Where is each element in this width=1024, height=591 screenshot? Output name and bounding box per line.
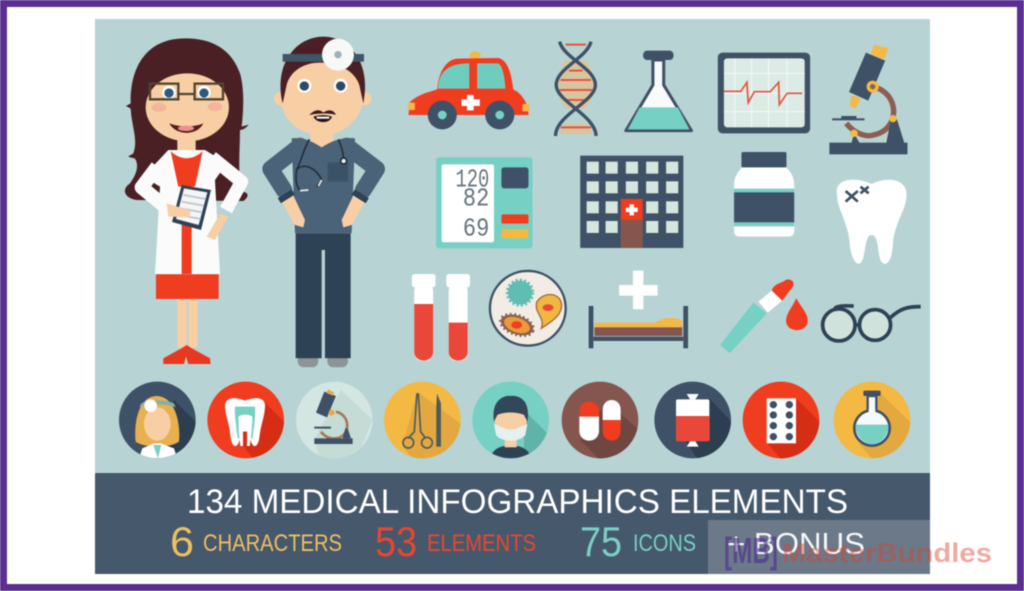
round icon: female doctor (118, 381, 196, 458)
bonus label: + BONUS (727, 526, 865, 561)
glasses (150, 84, 223, 99)
mouth (169, 123, 203, 133)
icon: microscope (829, 45, 907, 154)
watermark logo: [MB] (724, 530, 778, 571)
stat: characters: CHARACTERS (203, 530, 342, 557)
watermark: MasterBundles (708, 520, 992, 574)
round icon: blood bag (654, 381, 732, 459)
torso (292, 138, 355, 233)
left arm (142, 167, 165, 207)
icon: blood pressure monitor: 82 (463, 184, 489, 214)
neck (311, 127, 333, 147)
character: male doctor (271, 37, 377, 367)
fringe (145, 55, 231, 88)
stat: elements: 53 (375, 518, 417, 565)
face (146, 73, 229, 141)
neck (177, 133, 196, 157)
eyes (297, 79, 348, 93)
stat: elements: ELEMENTS (427, 530, 536, 557)
right hand (207, 214, 228, 240)
hair (281, 37, 365, 103)
right arm (212, 157, 242, 210)
cheeks (152, 102, 222, 112)
icon: medicine jar (734, 152, 794, 237)
icon: dropper with blood (720, 280, 808, 353)
icons: top and middle rows (408, 42, 907, 264)
icon: ambulance (408, 51, 529, 129)
icon: tooth (837, 180, 907, 264)
stat: characters (170, 518, 342, 565)
round icon: round flask (833, 380, 911, 460)
icons: bottom row (412, 271, 921, 361)
icon: hospital (580, 156, 683, 248)
icon row: round long-shadow icons (119, 382, 919, 467)
panel: illustration background (95, 19, 930, 574)
round icon: microscope (296, 382, 373, 460)
icon: blood pressure monitor: 69 (463, 214, 489, 244)
clipboard (172, 185, 211, 230)
eyes (162, 86, 211, 99)
head (280, 57, 363, 135)
hair back (125, 38, 249, 201)
icon: DNA helix (556, 42, 596, 136)
left hand (167, 203, 191, 217)
icon: blood pressure monitor (436, 157, 533, 248)
icon: heart monitor (718, 53, 810, 133)
arms (271, 146, 377, 190)
banner (95, 473, 930, 574)
stat: icons: 75 (580, 518, 622, 565)
shoes (298, 355, 348, 367)
skirt (156, 274, 219, 299)
stat: icons (580, 518, 696, 565)
pocket (328, 162, 348, 182)
watermark name: MasterBundles (782, 538, 992, 568)
dress (171, 151, 203, 274)
trousers (296, 233, 351, 358)
round icon: blister pack (742, 380, 820, 460)
banner title: 134 MEDICAL INFOGRAPHICS ELEMENTS (187, 483, 848, 521)
stat: elements (375, 518, 536, 565)
icon: hospital bed with cross (589, 271, 688, 348)
head mirror (322, 39, 354, 71)
icon: petri dish with microbes (490, 271, 566, 346)
cuffs (279, 192, 367, 201)
character: female doctor (125, 38, 249, 364)
icon: eyeglasses (823, 306, 921, 341)
icon: flask (626, 51, 691, 131)
legs (177, 299, 198, 348)
round icon: surgical instruments (383, 380, 462, 460)
round icon: pills (561, 381, 639, 460)
round icon: tooth (206, 380, 285, 460)
hands (282, 194, 365, 227)
stethoscope (296, 139, 347, 191)
coat body (143, 150, 227, 274)
round icon: surgeon with mask (472, 381, 550, 459)
icon: blood pressure monitor: 120 (455, 165, 489, 195)
stat: icons: ICONS (633, 530, 696, 557)
headband (283, 54, 364, 62)
ears (274, 92, 372, 105)
stat: characters: 6 (170, 518, 194, 565)
icon: blood test tubes (412, 274, 470, 361)
moustache and mouth (309, 110, 336, 122)
shoes (163, 345, 211, 364)
